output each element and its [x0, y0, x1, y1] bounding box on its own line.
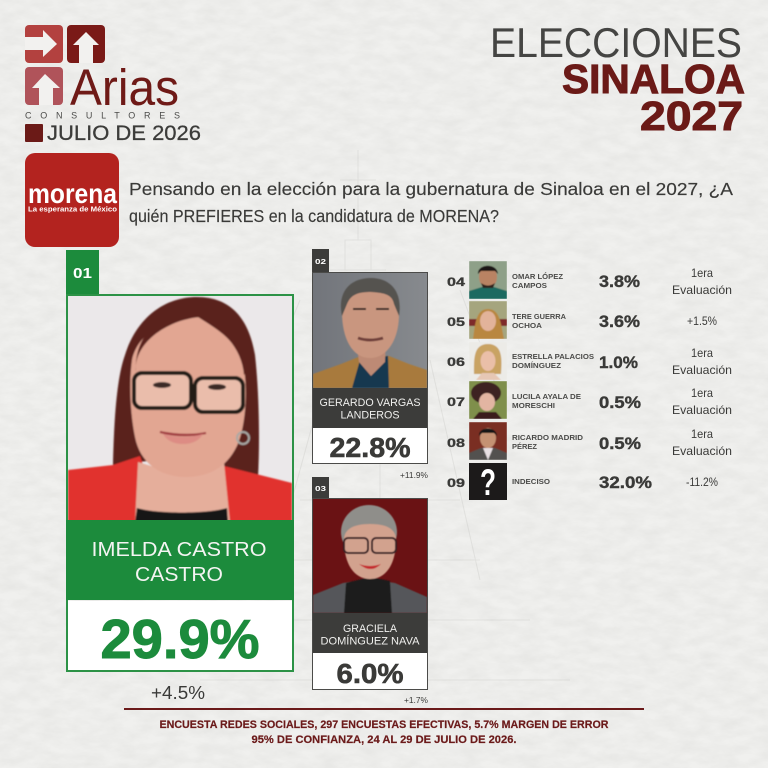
- icon: question mark: ?: [480, 462, 496, 503]
- row 05: +1.5%: [687, 316, 717, 328]
- morena logo: La esperanza de México: [28, 206, 117, 214]
- logo subtitle: CONSULTORES: [25, 110, 180, 120]
- row 06: Evaluación: [672, 363, 732, 377]
- row 05: OCHOA: [512, 321, 543, 330]
- survey methodology note: 95% DE CONFIANZA, 24 AL 29 DE JULIO DE 2026.: [252, 734, 516, 746]
- photo: Lucila Ayala: [469, 381, 507, 419]
- logo wordmark: Arias: [70, 59, 179, 116]
- survey question: [129, 179, 733, 226]
- row 07: MORESCHI: [512, 401, 555, 410]
- row 09: 09: [447, 476, 465, 490]
- row 06: [447, 342, 732, 380]
- icon: question mark: [469, 462, 507, 503]
- row 04: CAMPOS: [512, 281, 547, 290]
- row 06: ESTRELLA PALACIOS: [512, 352, 594, 361]
- icon: arrow up tile light: [25, 67, 63, 105]
- name band: [313, 613, 427, 653]
- footer rule: [124, 708, 644, 710]
- row 05: 3.6%: [599, 313, 640, 331]
- rank tab 03: 03: [315, 484, 326, 493]
- row 04: Evaluación: [672, 283, 732, 297]
- rank tab 01: [66, 250, 99, 295]
- survey question: quién PREFIERES en la candidatura de MORENA?: [129, 206, 499, 226]
- row 08: PÉREZ: [512, 442, 537, 451]
- row 09: 32.0%: [599, 474, 652, 492]
- name band: IMELDA CASTRO: [92, 538, 266, 561]
- title: [490, 19, 745, 139]
- row 07: 0.5%: [599, 394, 641, 412]
- name band: CASTRO: [135, 563, 223, 586]
- panel: candidate 02: [312, 249, 428, 464]
- photo: Imelda Castro: [68, 296, 292, 522]
- name band: LANDEROS: [340, 410, 400, 422]
- panel: candidate 01: [66, 250, 294, 671]
- row 06: DOMÍNGUEZ: [512, 361, 561, 370]
- rank tab 02: [312, 249, 329, 273]
- morena logo: [25, 153, 119, 247]
- row 08: Evaluación: [672, 444, 732, 458]
- change label 03: +1.7%: [404, 696, 428, 705]
- title: 2027: [640, 93, 743, 139]
- percentage: 6.0%: [336, 658, 404, 689]
- row 07: 07: [447, 395, 465, 409]
- row 06: 1.0%: [599, 354, 638, 372]
- title: ELECCIONES: [490, 19, 742, 66]
- survey methodology note: [160, 719, 609, 746]
- row 07: LUCILA AYALA DE: [512, 392, 581, 401]
- row 07: 1era: [691, 386, 713, 400]
- percentage: [68, 601, 292, 670]
- row 05: TERE GUERRA: [512, 312, 567, 321]
- card frame: [312, 498, 428, 690]
- row 04: 04: [447, 275, 465, 289]
- row 09: [447, 462, 718, 503]
- photo: Ricardo Madrid: [469, 422, 507, 460]
- rank tab 01: 01: [73, 265, 92, 282]
- icon: arrow right tile: [25, 25, 63, 63]
- panel: candidate 03: [312, 477, 428, 690]
- survey question: Pensando en la elección para la gubernatura de Sinaloa en el 2027, ¿A: [129, 179, 733, 199]
- change label 01: +4.5%: [151, 683, 205, 703]
- row 08: 1era: [691, 427, 713, 441]
- card frame: [67, 295, 293, 671]
- photo: Gerardo Vargas: [313, 273, 427, 388]
- rank tab 03: [312, 477, 329, 499]
- faint cathedral illustration: [200, 150, 570, 680]
- survey methodology note: ENCUESTA REDES SOCIALES, 297 ENCUESTAS EFECTIVAS, 5.7% MARGEN DE ERROR: [160, 719, 609, 731]
- name band: GERARDO VARGAS: [320, 397, 420, 409]
- morena logo: morena: [28, 178, 117, 209]
- name band: DOMÍNGUEZ NAVA: [320, 634, 420, 648]
- percentage: [313, 428, 427, 463]
- rank tab 02: 02: [315, 257, 326, 266]
- percentage: 22.8%: [330, 432, 410, 463]
- row 07: Evaluación: [672, 403, 732, 417]
- percentage: 29.9%: [100, 608, 260, 670]
- row 06: 1era: [691, 346, 713, 360]
- row 08: RICARDO MADRID: [512, 433, 584, 442]
- icon: arrow up tile dark: [67, 25, 105, 63]
- title: SINALOA: [562, 56, 745, 102]
- date label: JULIO DE 2026: [47, 122, 201, 145]
- row 04: OMAR LÓPEZ: [512, 272, 563, 281]
- name band: GRACIELA: [343, 623, 398, 635]
- row 04: 1era: [691, 266, 713, 280]
- row 08: 0.5%: [599, 435, 641, 453]
- row 09: INDECISO: [512, 477, 550, 486]
- row 06: 06: [447, 355, 465, 369]
- logo: Arias Consultores: [25, 25, 180, 120]
- photo: Omar Lopez: [469, 261, 507, 299]
- row 05: 05: [447, 315, 465, 329]
- row 05: [447, 301, 717, 339]
- row 08: [447, 422, 732, 460]
- percentage: [313, 653, 427, 689]
- photo: Graciela Dominguez: [313, 499, 427, 613]
- row 04: 3.8%: [599, 273, 640, 291]
- row 09: -11.2%: [686, 477, 718, 489]
- card frame: [312, 272, 428, 464]
- change label 02: +11.9%: [400, 471, 428, 480]
- row 07: [447, 381, 732, 419]
- photo: Estrella Palacios: [473, 342, 502, 380]
- name band: [66, 520, 294, 600]
- photo: Tere Guerra: [469, 301, 507, 339]
- name band: [313, 388, 427, 428]
- row 08: 08: [447, 436, 465, 450]
- row 04: [447, 261, 732, 299]
